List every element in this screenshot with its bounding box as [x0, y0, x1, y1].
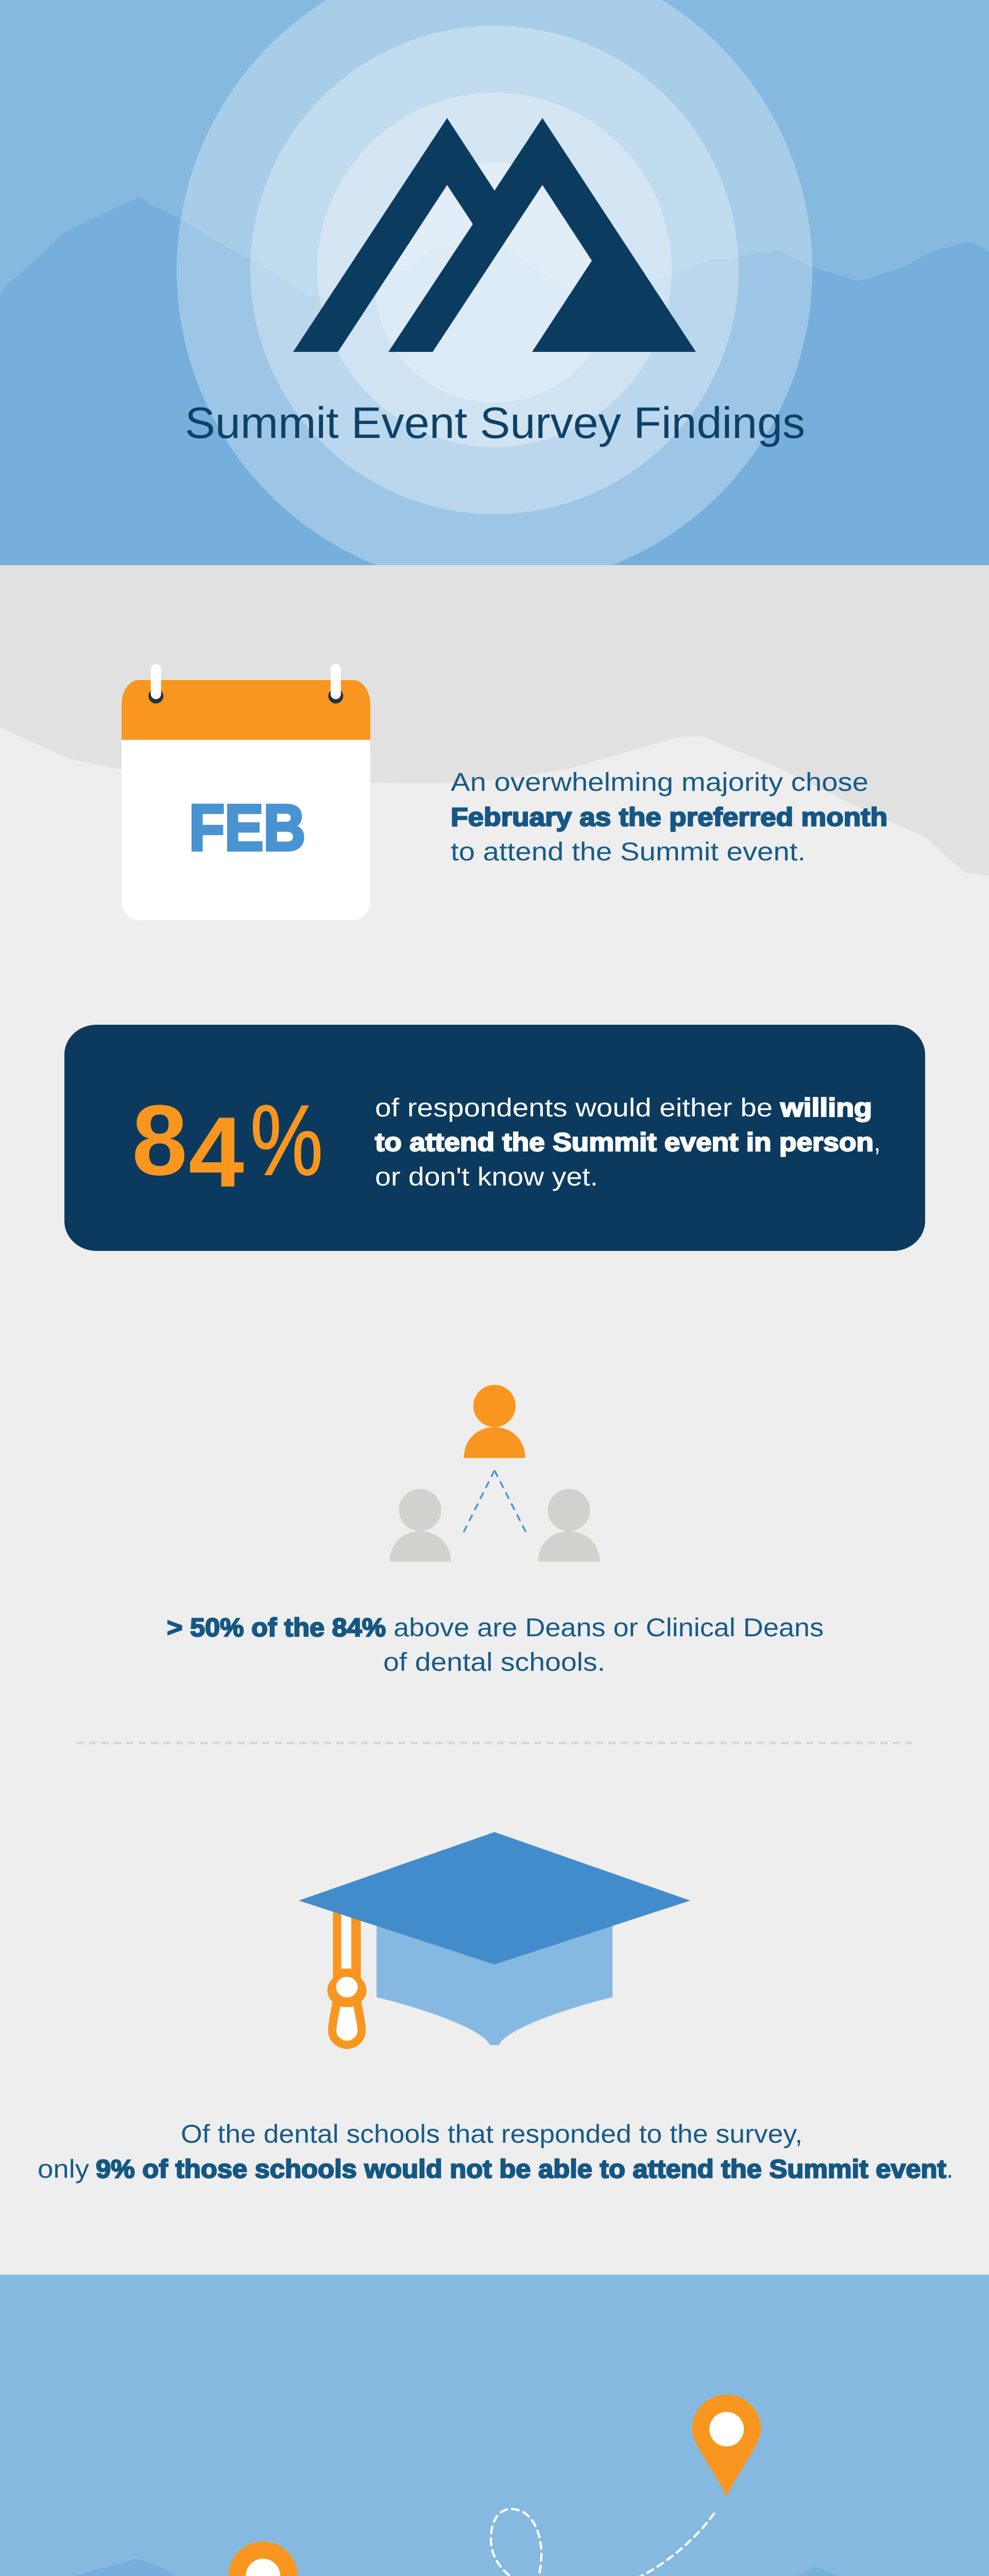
header mountain range [0, 197, 989, 565]
grey person left [389, 1489, 451, 1562]
panel: travel [0, 2275, 989, 2576]
dashed links [464, 1470, 526, 1532]
icon: right map pin [692, 2395, 761, 2497]
callout text: or don't know yet. [375, 1162, 598, 1191]
icon: left map pin [229, 2541, 298, 2576]
dashed travel route [268, 2509, 714, 2576]
text block: dental schools [38, 2120, 953, 2183]
text block: preferred month: to attend the Summit event. [451, 837, 806, 866]
callout text: of respondents would either be [375, 1093, 773, 1122]
callout text [375, 1093, 881, 1191]
panel: header [0, 0, 989, 588]
orange person [464, 1385, 525, 1458]
cap board [299, 1832, 690, 1964]
concentric circles [177, 0, 812, 588]
big number [132, 1084, 323, 1208]
text block: dental schools: Of the dental schools that responded to the survey, [181, 2120, 803, 2148]
text block: dental schools: only [38, 2155, 89, 2183]
big number: % [250, 1084, 323, 1196]
callout text: to attend the Summit event in person [375, 1128, 874, 1157]
tassel [328, 1901, 367, 2049]
icon: calendar [122, 664, 370, 920]
text block: dental schools: . [946, 2155, 953, 2183]
text block: preferred month: February as the preferred month [451, 803, 888, 832]
panel: survey findings background [0, 565, 989, 2275]
icon: mountain logo [293, 118, 696, 352]
callout text: , [874, 1128, 881, 1157]
big number: 84 [132, 1084, 244, 1208]
icon: graduation cap [299, 1832, 690, 2049]
panel: 84% callout [64, 1025, 925, 1251]
callout text: willing [780, 1093, 872, 1122]
cap base [377, 1906, 612, 2045]
footer mountain range [0, 2558, 989, 2576]
text block: preferred month [451, 768, 888, 866]
text block: deans: > 50% of the 84% [167, 1613, 386, 1642]
text block: dental schools: 9% of those schools would not be able to attend the Summit event [96, 2155, 946, 2183]
text block: deans: of dental schools. [383, 1648, 605, 1676]
icon: people hierarchy [389, 1385, 600, 1562]
title: Summit Event Survey Findings [185, 399, 805, 448]
text block: deans: above are Deans or Clinical Deans [394, 1613, 824, 1642]
text block: deans [167, 1613, 824, 1676]
text block: preferred month: An overwhelming majority chose [451, 768, 868, 796]
grey person right [538, 1489, 600, 1562]
calendar month label: FEB [189, 791, 305, 864]
